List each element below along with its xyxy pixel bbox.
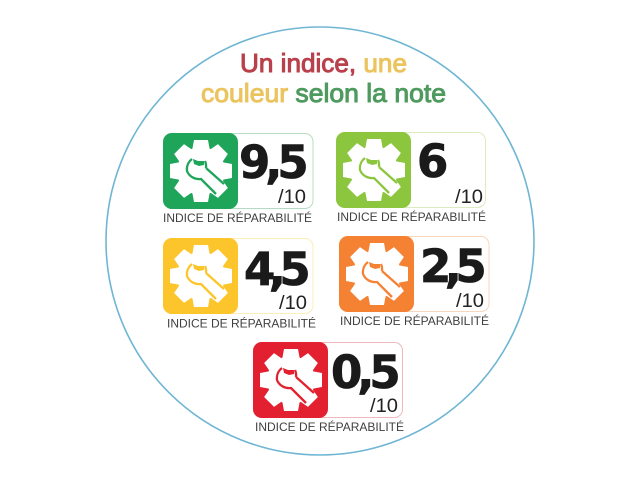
card: score 9,5 green: INDICE DE RÉPARABILITÉ — [163, 210, 312, 225]
card: score 2,5 orange — [339, 236, 489, 328]
card: score 0,5 red — [253, 342, 404, 434]
card: score 6 light green — [336, 132, 486, 224]
card: score 0,5 red: INDICE DE RÉPARABILITÉ — [255, 419, 404, 434]
background circle — [106, 27, 534, 455]
card: score 0,5 red: 0,5 — [331, 346, 398, 399]
card: score 9,5 green: 9,5 — [239, 136, 306, 189]
card: score 9,5 green — [163, 133, 313, 225]
title: Un indice, une — [240, 48, 407, 78]
card: score 2,5 orange: 2,5 — [420, 240, 484, 293]
card: score 9,5 green: /10 — [278, 187, 306, 208]
card: score 4,5 yellow: 4,5 — [244, 243, 308, 296]
card: score 4,5 yellow — [163, 238, 316, 330]
card: score 2,5 orange: INDICE DE RÉPARABILITÉ — [340, 313, 489, 328]
card: score 0,5 red: /10 — [370, 396, 398, 417]
card: score 2,5 orange: /10 — [456, 291, 484, 312]
card: score 4,5 yellow: INDICE DE RÉPARABILITÉ — [167, 316, 316, 330]
card: score 6 light green: /10 — [455, 187, 483, 208]
card: score 6 light green: INDICE DE RÉPARABILITÉ — [337, 209, 486, 224]
card: score 4,5 yellow: /10 — [279, 293, 307, 314]
card: score 6 light green: 6 — [417, 135, 446, 188]
title: couleur selon la note — [201, 78, 446, 108]
title — [201, 48, 446, 108]
